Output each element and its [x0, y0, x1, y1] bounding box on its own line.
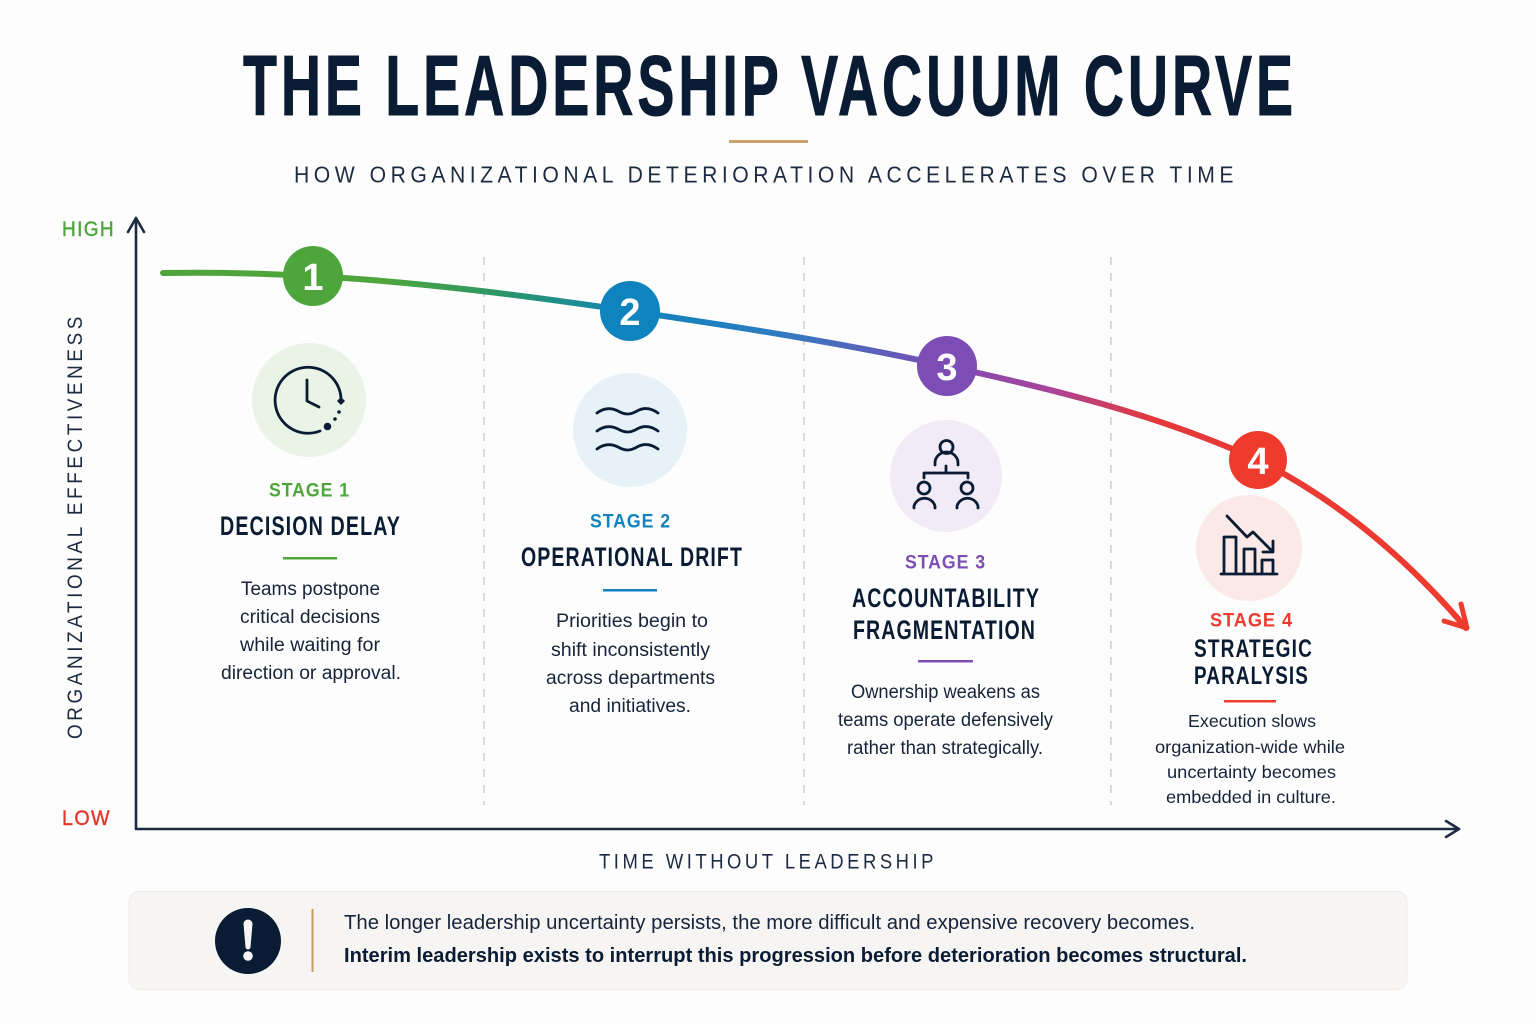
stage description: Ownership weakens as: [851, 682, 1040, 703]
stage description: across departments: [546, 668, 715, 689]
badge 2: 2: [619, 292, 641, 334]
badge 4: [1229, 431, 1287, 489]
stage description: and initiatives.: [569, 696, 691, 717]
stage description: while waiting for: [239, 635, 381, 656]
stage description: Priorities begin to: [556, 611, 708, 632]
panel: stage 2: [521, 281, 743, 717]
badge 1: 1: [302, 257, 324, 299]
stage description: Teams postpone: [241, 579, 380, 600]
stage description: uncertainty becomes: [1167, 762, 1336, 782]
stage description: organization-wide while: [1155, 737, 1345, 757]
subtitle: HOW ORGANIZATIONAL DETERIORATION ACCELERATES OVER TIME: [294, 162, 1238, 188]
stage heading: FRAGMENTATION: [853, 615, 1036, 645]
stage description: [1155, 711, 1345, 807]
icon: waves: [573, 373, 687, 487]
stage description: critical decisions: [240, 607, 380, 628]
stage description: Execution slows: [1188, 711, 1316, 731]
stage label: STAGE 2: [590, 512, 671, 532]
stage label: STAGE 3: [905, 552, 986, 574]
badge 4: 4: [1247, 441, 1269, 483]
badge 1: [283, 246, 343, 306]
icon: falling bar chart: [1196, 495, 1302, 601]
stage description: teams operate defensively: [838, 710, 1053, 731]
decline curve with arrow: [163, 273, 1467, 628]
stage heading: [1194, 635, 1313, 690]
stage heading: STRATEGIC: [1194, 635, 1313, 663]
axis label: high: HIGH: [62, 218, 115, 241]
stage description: direction or approval.: [221, 663, 401, 684]
badge 3: [917, 336, 977, 396]
callout text: The longer leadership uncertainty persists, the more difficult and expensive recovery becomes.: [344, 912, 1195, 934]
icon: exclamation: [215, 908, 281, 974]
y axis title: ORGANIZATIONAL EFFECTIVENESS: [64, 313, 87, 739]
stage heading: [852, 583, 1040, 645]
badge 3: 3: [936, 347, 958, 389]
callout text: [344, 912, 1247, 967]
panel: stage 1: [220, 246, 401, 684]
stage heading: OPERATIONAL DRIFT: [521, 542, 743, 572]
x axis title: TIME WITHOUT LEADERSHIP: [599, 850, 937, 874]
stage description: [546, 611, 715, 717]
stage label: STAGE 4: [1210, 610, 1293, 632]
stage description: [221, 579, 401, 684]
panel: stage 3: [838, 336, 1053, 759]
callout text: Interim leadership exists to interrupt this progression before deterioration becomes structural.: [344, 945, 1247, 967]
badge 2: [600, 281, 660, 341]
panel: stage 4: [1155, 431, 1345, 807]
stage description: shift inconsistently: [551, 640, 711, 661]
stage description: [838, 682, 1053, 759]
stage label: STAGE 1: [269, 480, 350, 502]
stage heading: ACCOUNTABILITY: [852, 583, 1040, 613]
stage description: rather than strategically.: [847, 738, 1043, 759]
icon: clock: [252, 343, 366, 457]
stage description: embedded in culture.: [1166, 787, 1336, 807]
icon: org chart: [890, 420, 1002, 532]
stage heading: DECISION DELAY: [220, 511, 401, 541]
stage heading: PARALYSIS: [1194, 662, 1309, 690]
axis label: low: LOW: [62, 807, 111, 830]
chart axes: [128, 218, 1459, 837]
callout: [129, 892, 1407, 990]
title underline: [729, 140, 808, 143]
